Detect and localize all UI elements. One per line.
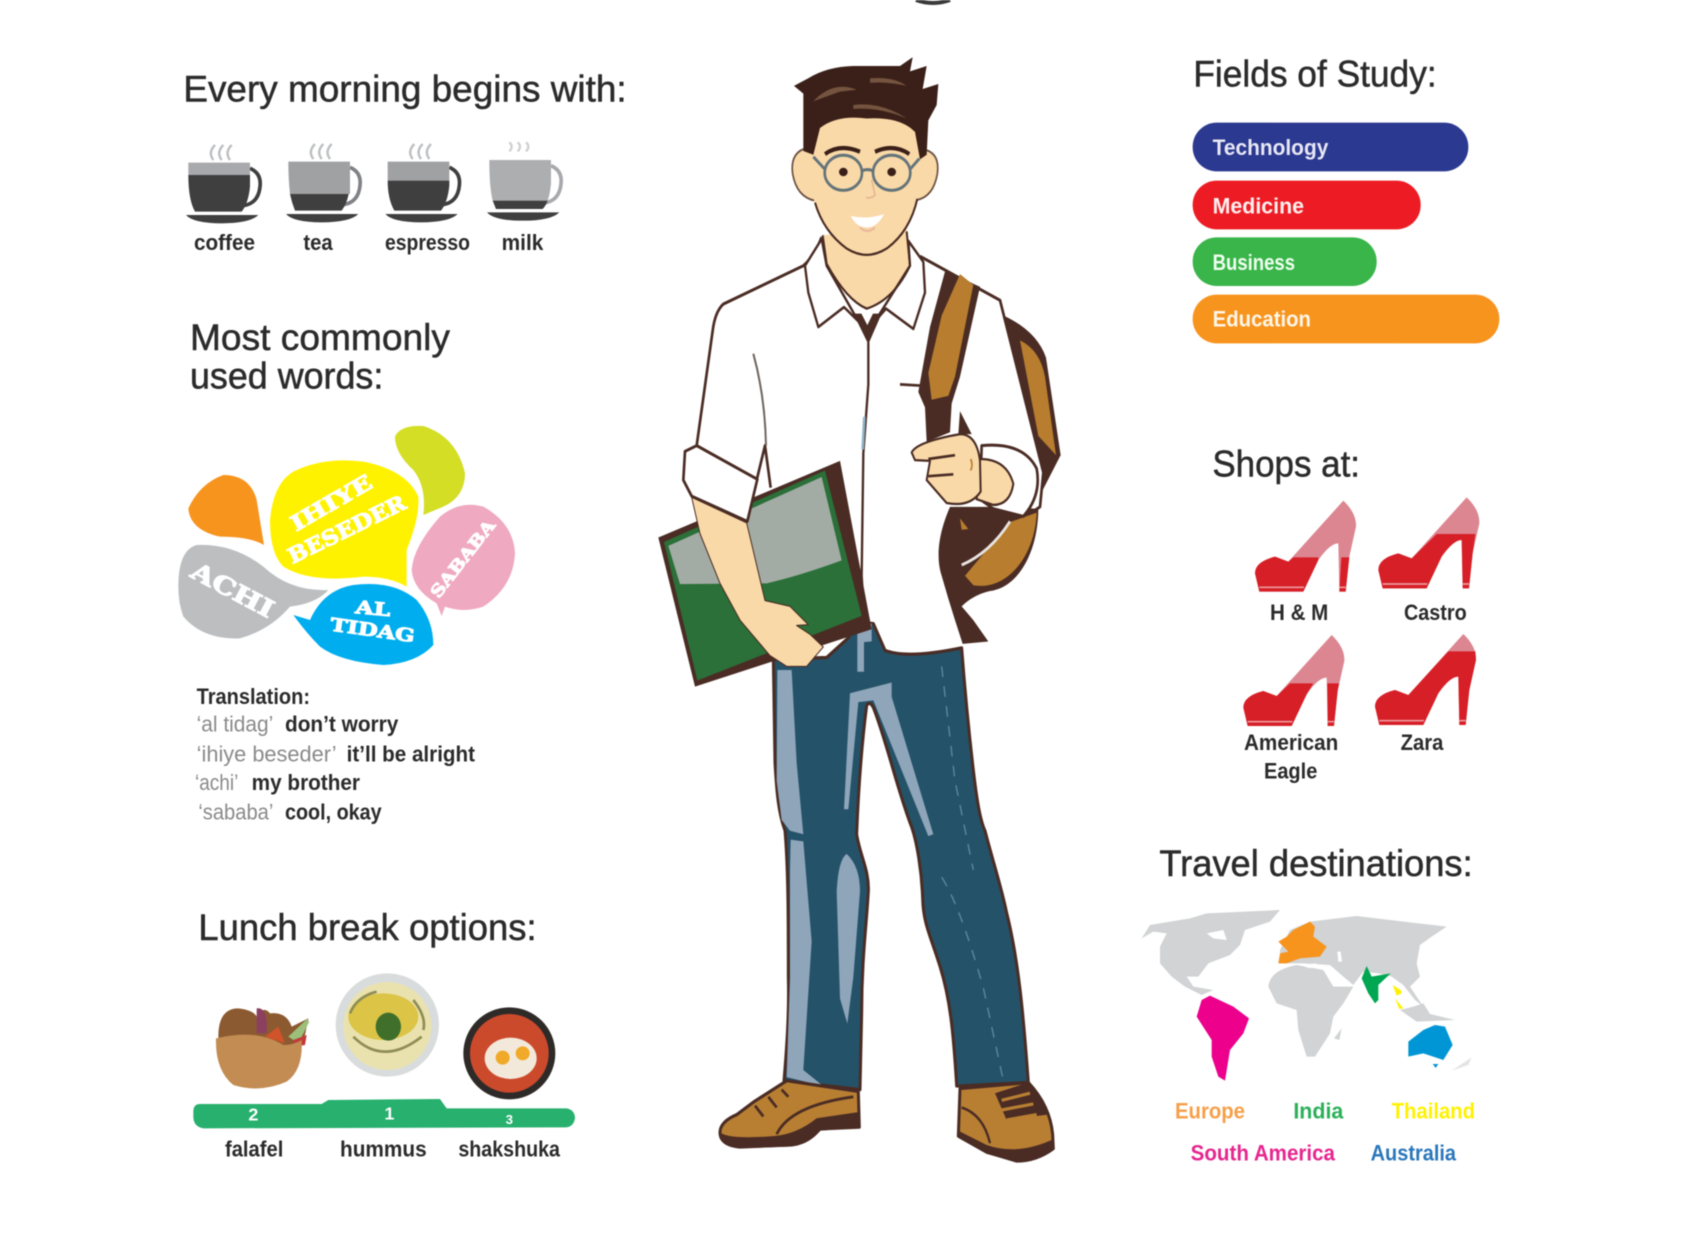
icon: milk cup [487,142,561,221]
heading: most commonly used words: Most commonly [190,317,450,358]
bubble: orange [188,475,264,545]
character: legs and shoes [720,622,1053,1162]
bubble: al tidag: TIDAG [329,615,416,647]
left forearm and hand [692,497,823,666]
bag strap [900,272,980,442]
text block: translation [195,684,476,824]
bubble: al tidag: AL [353,597,392,621]
bubble: sababa: SABABA [426,515,500,602]
legend labels: Australia [1371,1141,1457,1166]
icon: hummus [336,973,439,1077]
heading: most commonly used words [190,317,450,396]
bubble: ihiye beseder: IHIYE [287,470,377,537]
text block: translation: ‘al tidag’ [197,712,273,737]
text block: translation: ‘sababa’ [198,799,273,824]
shirt fold lines [753,354,766,446]
legend labels: India [1293,1098,1344,1123]
heading: every morning: Every morning begins with: [183,69,627,110]
panel: morning drinks [183,69,627,396]
collar [805,239,925,344]
label: castro: Castro [1404,600,1467,625]
icon: shoe h&m [1255,501,1356,592]
left sleeve cuff [683,446,757,521]
icon: shoe castro [1378,497,1479,588]
text block: translation: cool, okay [285,799,382,824]
text block: translation: Translation: [197,684,310,709]
hair [794,57,938,159]
map: gray landmasses [1142,910,1472,1071]
heading: most commonly used words: used words: [190,355,383,396]
heading: travel destinations: Travel destinations: [1159,843,1473,884]
icon: tea cup [286,144,360,222]
icon: shoe zara [1375,634,1476,725]
bar: technology [1193,123,1468,171]
bubble: achi: ACHI [185,555,279,624]
jaw line [815,199,917,309]
panel: speech bubbles and translation [178,426,515,824]
podium numbers: 1 [384,1103,394,1123]
bar: education: Education [1213,307,1311,332]
bar: education [1193,295,1499,343]
icon: shoe american eagle [1243,635,1344,726]
labels: lunch options: falafel [225,1137,283,1162]
map: water gaps [1207,930,1342,968]
bar: business: Business [1213,250,1295,275]
bar: medicine: Medicine [1213,193,1304,218]
map: europe [1278,922,1327,963]
label: milk: milk [502,230,544,255]
eyebrows [825,148,909,154]
bubble: ihiye beseder: BESEDER [284,491,411,570]
legend labels [1175,1098,1475,1166]
book [658,461,872,687]
podium [193,1099,575,1128]
panel: travel destinations [1142,843,1475,1166]
text block: translation: my brother [252,770,360,795]
panel: shops [1212,444,1479,783]
heading: shops at: Shops at: [1212,444,1360,485]
map: australia [1408,1025,1453,1068]
map: south america [1197,996,1249,1081]
shoe: left [720,1081,859,1149]
nose [866,180,875,198]
podium numbers [248,1103,513,1127]
label: american eagle: Eagle [1264,758,1317,783]
icon: falafel [216,1008,309,1088]
label: coffee: coffee [194,230,255,255]
label: espresso: espresso [385,230,470,255]
podium numbers: 2 [248,1105,258,1125]
label: tea: tea [303,230,333,255]
right sleeve cuff [980,445,1038,516]
text block: translation: it’ll be alright [347,742,476,767]
neck [823,229,910,309]
bubble: lime [395,426,465,515]
podium numbers: 3 [506,1112,513,1127]
bag pouch and tail [939,507,1038,644]
heading: fields of study: Fields of Study: [1193,54,1437,95]
ears [792,149,938,201]
map: thailand [1393,985,1403,1009]
labels: lunch options [225,1137,561,1162]
right wrist [977,459,1013,505]
label: h&m: H & M [1270,600,1328,625]
map: india [1362,966,1391,1003]
shoe: right [958,1082,1053,1162]
eyes [839,168,896,176]
labels: lunch options: shakshuka [458,1137,561,1162]
world map [1142,910,1472,1081]
label: zara: Zara [1401,730,1444,755]
bubble: sababa [412,505,515,616]
bar: business [1193,237,1377,286]
heading: lunch break options: Lunch break options: [198,907,537,948]
mouth [851,214,884,231]
label: american eagle [1244,730,1338,783]
shirt placket [862,342,868,614]
label: american eagle: American [1244,730,1338,755]
icon: coffee cup [186,145,260,223]
glasses [813,155,919,190]
backpack body [1003,316,1061,495]
placket highlight [863,417,864,449]
bubble: achi [178,545,328,638]
right hand [912,434,981,504]
legend labels: Europe [1175,1098,1245,1123]
jeans [773,622,1028,1090]
shirt torso outline [697,237,1043,518]
jeans highlights [777,624,933,1086]
character: upper body [658,57,1061,687]
bubble: ihiye beseder [270,460,419,587]
panel: lunch break [193,907,575,1162]
icon: shakshuka [463,1007,555,1099]
labels: lunch options: hummus [340,1137,427,1162]
bubble: al tidag [293,584,433,665]
top edge arc [916,0,950,3]
text block: translation: ‘achi’ [195,770,238,795]
icon: espresso cup [385,144,460,222]
face [813,113,918,255]
bar: medicine [1193,181,1421,229]
jeans stitching [942,666,1003,1081]
legend labels: South America [1191,1141,1336,1166]
panel: fields of study [1193,54,1499,343]
legend labels: Thailand [1392,1098,1475,1123]
bar: technology: Technology [1213,135,1329,160]
text block: translation: ‘ihiye beseder’ [197,742,337,767]
text block: translation: don’t worry [285,712,399,737]
